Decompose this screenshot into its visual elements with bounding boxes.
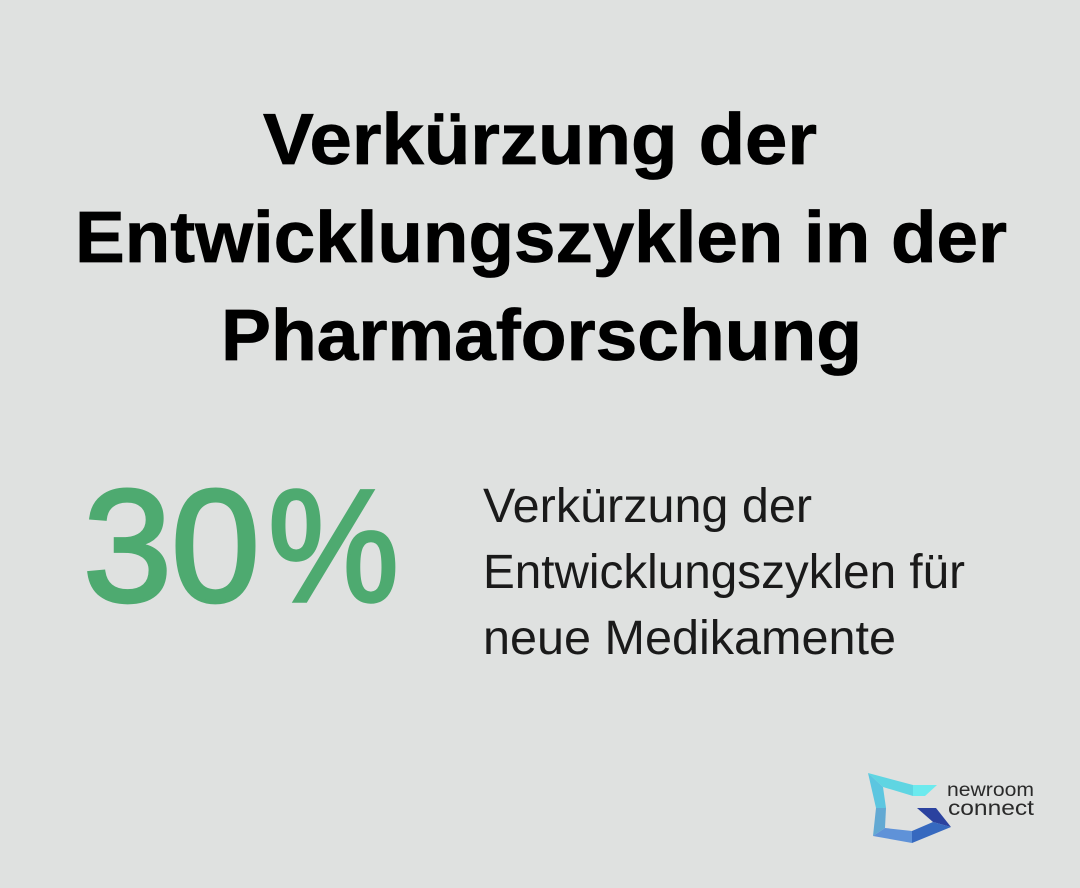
description text: Entwicklungszyklen für bbox=[483, 546, 965, 599]
logo: newroom connect bbox=[868, 773, 1034, 843]
logo wordmark: connect bbox=[948, 796, 1034, 820]
logo wordmark: newroom bbox=[947, 779, 1034, 801]
big number: 30%: % bbox=[268, 456, 399, 635]
description text: neue Medikamente bbox=[483, 612, 896, 665]
big number: 30% bbox=[83, 456, 399, 635]
description text bbox=[483, 480, 965, 665]
title: Pharmaforschung bbox=[221, 296, 862, 376]
big number: 30%: 30 bbox=[83, 456, 260, 635]
logo wordmark bbox=[947, 779, 1034, 820]
title: Verkürzung der bbox=[263, 100, 817, 180]
title: Entwicklungszyklen in der bbox=[75, 198, 1007, 278]
icon: logo mark bbox=[868, 773, 951, 843]
title bbox=[75, 100, 1007, 376]
description text: Verkürzung der bbox=[483, 480, 812, 533]
